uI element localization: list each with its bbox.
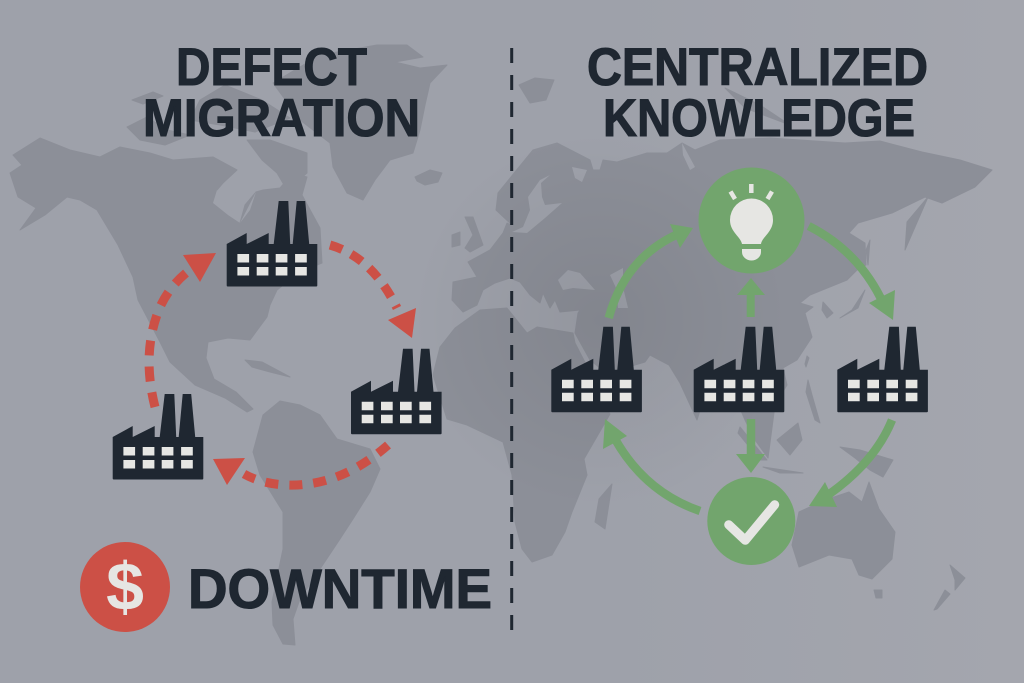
heading: centralized knowledge: [587, 38, 928, 148]
arrow: top factory to right factory: [330, 245, 416, 338]
icon: check circle: [707, 477, 795, 565]
arrow: right factory to left factory: [213, 445, 388, 485]
icon: light bulb: [698, 168, 804, 274]
arrow: left factory to top factory: [149, 253, 216, 407]
heading: centralized knowledge: KNOWLEDGE: [603, 89, 915, 148]
panel: centralized knowledge: [551, 38, 928, 565]
arrow: west factory to bulb: [609, 224, 693, 318]
heading: defect migration: DEFECT: [176, 38, 367, 97]
arrow: central factory to bulb: [737, 278, 765, 317]
divider: dashed line: [510, 48, 513, 630]
panel: defect migration: [80, 38, 492, 632]
icon: factory left: [113, 394, 203, 480]
icon: factory top: [227, 201, 317, 286]
arrow: bulb to east factory: [809, 226, 895, 320]
icon: dollar coin: $: [106, 549, 144, 625]
heading: defect migration: MIGRATION: [143, 89, 420, 148]
icon: factory right: [351, 349, 442, 434]
label: downtime: DOWNTIME: [188, 557, 492, 620]
icon: factory east: [837, 327, 928, 412]
icon: factory west: [551, 327, 642, 412]
icon: factory central: [694, 327, 784, 412]
heading: defect migration: [143, 38, 420, 148]
arrow: check to west factory: [603, 419, 700, 511]
arrow: east factory to check: [809, 420, 892, 507]
inland seas: [213, 143, 695, 308]
soft shading: [410, 130, 790, 510]
heading: centralized knowledge: CENTRALIZED: [587, 38, 928, 97]
arrow: central factory to check: [736, 419, 765, 473]
icon: dollar coin: [80, 542, 170, 632]
